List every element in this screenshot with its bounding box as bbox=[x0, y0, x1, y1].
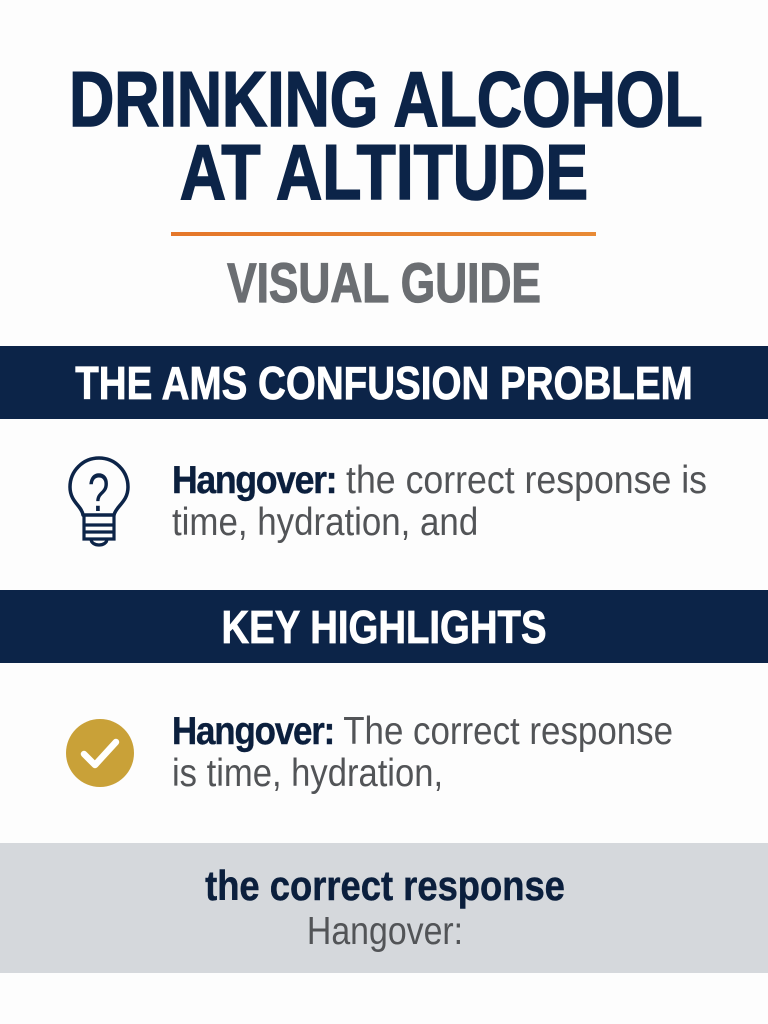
icon: lightbulb with question mark: ? bbox=[88, 462, 109, 522]
title: AT ALTITUDE bbox=[180, 128, 588, 216]
section banner: key highlights bbox=[0, 590, 768, 663]
footer heading: the correct response bbox=[205, 862, 565, 909]
text block: AMS hangover note: time, hydration, and bbox=[172, 501, 478, 544]
text block: key highlight note: is time, hydration, bbox=[172, 752, 443, 795]
orange title rule bbox=[171, 232, 596, 236]
section banner: key highlights: KEY HIGHLIGHTS bbox=[221, 601, 547, 653]
icon: lightbulb with question mark bbox=[68, 456, 130, 547]
title: DRINKING ALCOHOL bbox=[69, 55, 703, 143]
text block: AMS hangover note: Hangover: the correct response is bbox=[172, 459, 707, 502]
section banner: the AMS confusion problem: THE AMS CONFUSION PROBLEM bbox=[75, 357, 693, 409]
footer text: Hangover: bbox=[307, 910, 463, 953]
text block: key highlight note bbox=[172, 710, 673, 795]
title bbox=[69, 55, 703, 216]
subtitle: VISUAL GUIDE bbox=[227, 251, 541, 314]
text block: key highlight note: Hangover: The correct response bbox=[172, 710, 673, 753]
footer panel bbox=[0, 843, 768, 973]
icon: gold check badge bbox=[66, 719, 134, 787]
section banner: the AMS confusion problem bbox=[0, 346, 768, 419]
text block: AMS hangover note bbox=[172, 459, 707, 544]
